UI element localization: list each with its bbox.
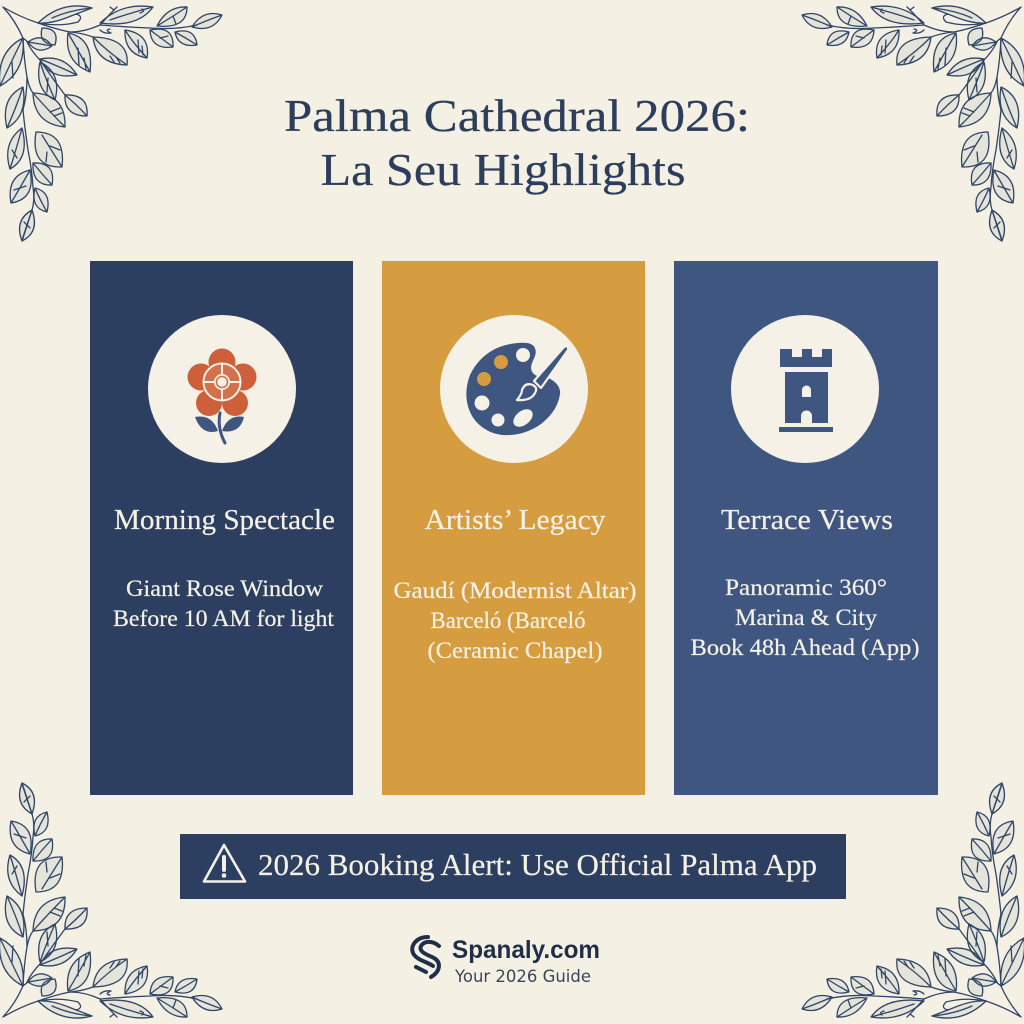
heading: Artists' Legacy: Artists’ Legacy <box>424 505 606 536</box>
icon: S mark <box>412 937 439 977</box>
botanical corner: bottom right <box>802 783 1024 1018</box>
brand name: Spanaly.com <box>452 936 600 964</box>
botanical corner: bottom left <box>0 783 222 1018</box>
title: Palma Cathedral 2026: <box>284 91 750 141</box>
title <box>284 91 750 195</box>
heading: Terrace Views: Terrace Views <box>721 505 893 536</box>
title: La Seu Highlights <box>320 145 686 195</box>
brand logo <box>412 936 600 987</box>
icon: rose window flower <box>188 348 256 443</box>
booking alert banner <box>180 834 846 899</box>
tagline: Your 2026 Guide <box>454 967 591 987</box>
alert text: 2026 Booking Alert: Use Official Palma App <box>258 847 817 882</box>
botanical corner: top left <box>0 6 222 241</box>
panel: artists' legacy <box>382 261 645 795</box>
body: Artists' Legacy details: Gaudí (Modernist Altar) <box>394 578 636 604</box>
body: Morning Spectacle details: Before 10 AM for light <box>113 606 334 632</box>
body: Terrace Views details: Book 48h Ahead (App) <box>690 635 920 661</box>
body: Terrace Views details <box>690 575 920 661</box>
heading: Morning Spectacle: Morning Spectacle <box>114 505 335 536</box>
icon: tower <box>779 349 833 432</box>
body: Morning Spectacle details: Giant Rose Window <box>126 576 323 602</box>
body: Artists' Legacy details: (Ceramic Chapel) <box>428 638 602 664</box>
body: Artists' Legacy details: Barceló (Barceló <box>430 608 586 634</box>
body: Terrace Views details: Panoramic 360° <box>725 575 887 601</box>
panel: terrace views <box>674 261 938 795</box>
icon: painter's palette <box>466 343 568 435</box>
botanical corner: top right <box>802 6 1024 241</box>
body: Terrace Views details: Marina & City <box>735 605 877 631</box>
body: Morning Spectacle details <box>113 576 334 632</box>
body: Artists' Legacy details <box>394 578 636 664</box>
panel: morning spectacle <box>90 261 353 795</box>
icon: warning triangle <box>204 845 245 882</box>
